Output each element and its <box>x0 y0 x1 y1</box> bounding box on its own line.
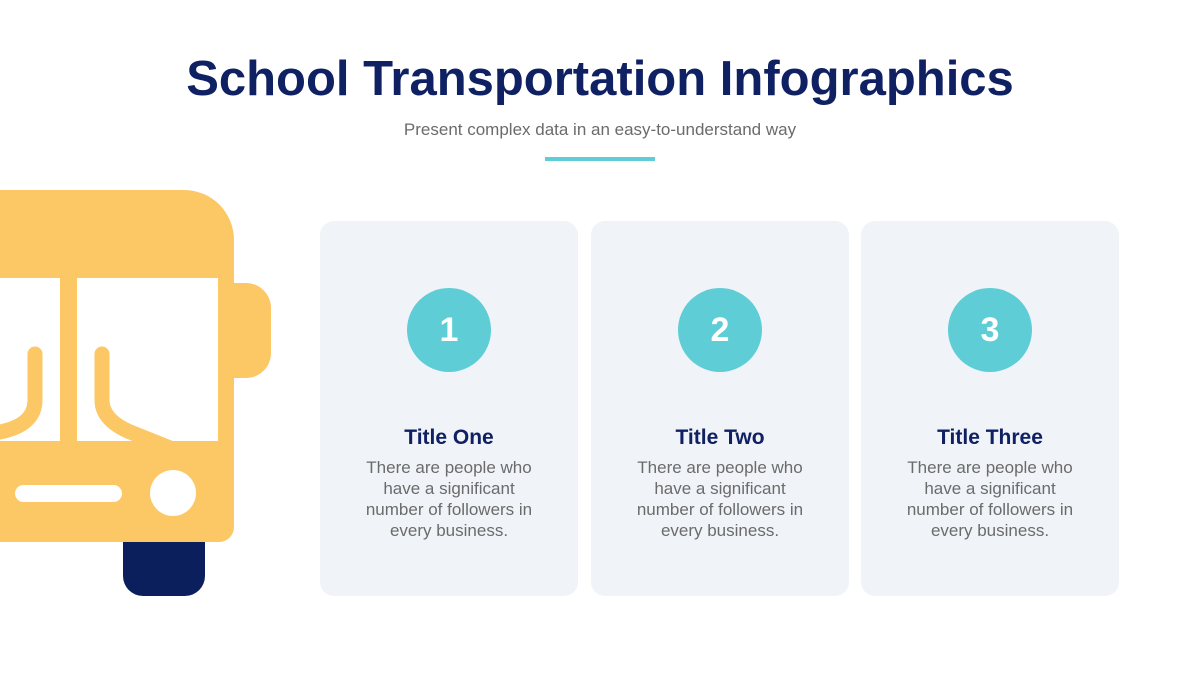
number badge 1 <box>407 288 491 372</box>
card text 1: There are people who have a significant number of followers in every business. <box>366 458 532 540</box>
icon: school bus <box>0 190 271 596</box>
card text 3: There are people who have a significant number of followers in every business. <box>907 458 1073 540</box>
panel: card 3 <box>861 221 1119 596</box>
number badge 2: 2 <box>711 311 729 349</box>
subtitle: Present complex data in an easy-to-understand way <box>404 120 796 139</box>
accent line <box>545 157 655 161</box>
number badge 1: 1 <box>440 311 458 349</box>
card title 3: Title Three <box>937 426 1043 449</box>
card title 1: Title One <box>404 426 494 449</box>
card title 2: Title Two <box>675 426 765 449</box>
panel: card 2 <box>591 221 849 596</box>
number badge 2 <box>678 288 762 372</box>
number badge 3: 3 <box>981 311 999 349</box>
card text 2: There are people who have a significant number of followers in every business. <box>637 458 803 540</box>
number badge 3 <box>948 288 1032 372</box>
panel: card 1 <box>320 221 578 596</box>
title: School Transportation Infographics <box>186 52 1014 106</box>
